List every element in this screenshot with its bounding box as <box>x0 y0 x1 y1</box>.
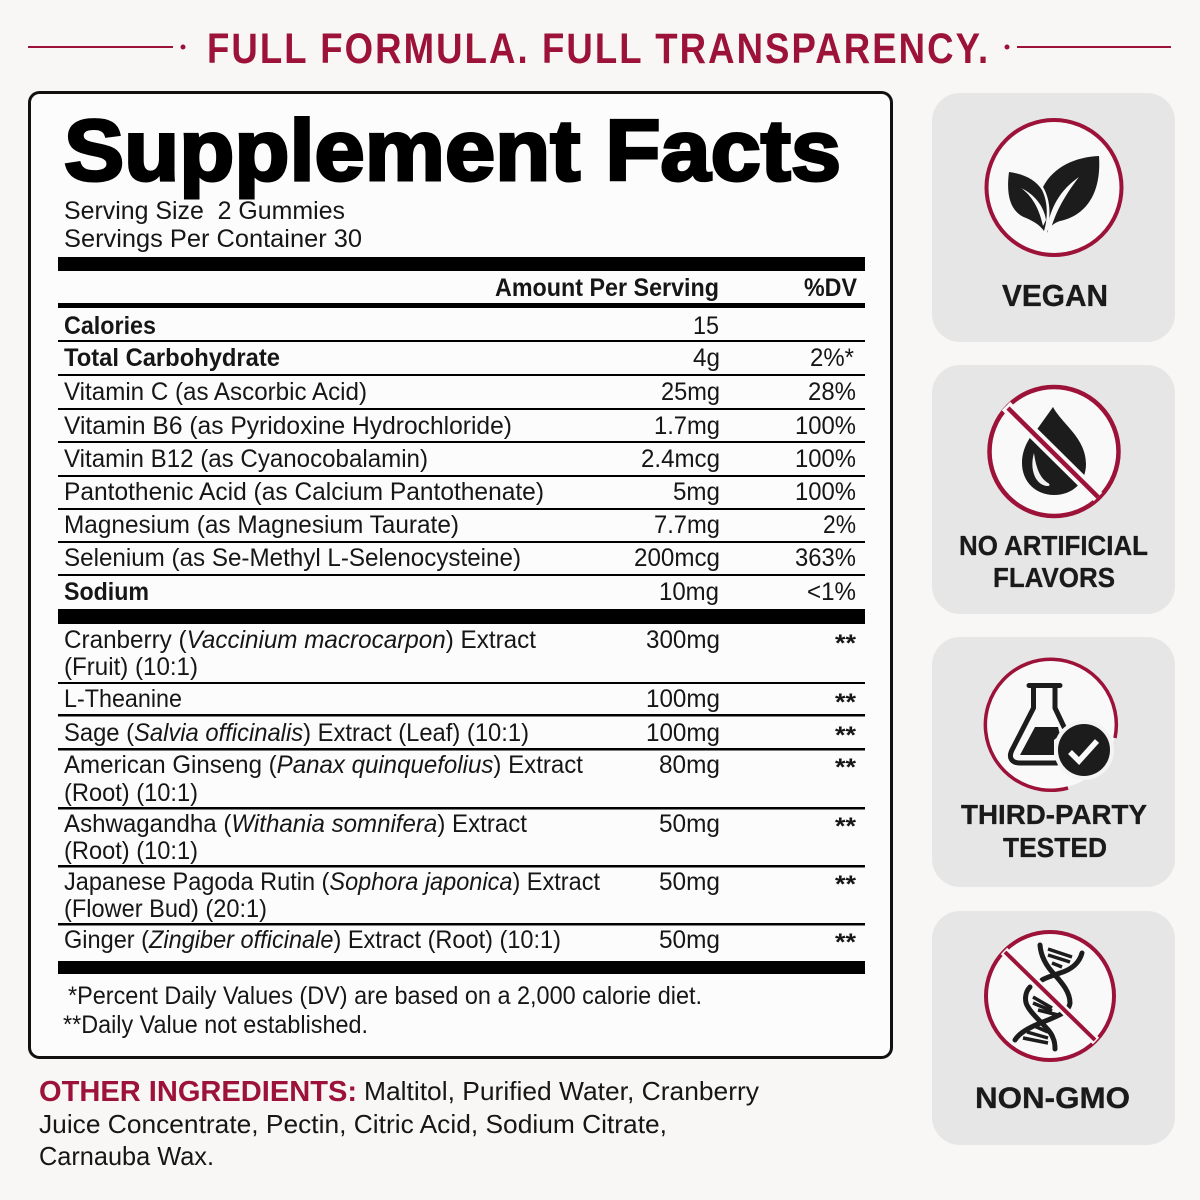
botanical rows: Sage (Salvia officinalis) Extract (Leaf) (10:1) <box>64 719 529 747</box>
botanical rows: L-Theanine <box>64 685 182 713</box>
botanical rows: ** <box>835 929 857 956</box>
other ingredients: Maltitol, Purified Water, Cranberry <box>364 1076 759 1106</box>
footnotes: **Daily Value not established. <box>63 1011 368 1039</box>
botanical rows: ** <box>835 722 857 749</box>
panel: no artificial flavors <box>932 365 1175 614</box>
serving info: Serving Size 2 Gummies <box>64 197 345 225</box>
nutrient rows: Magnesium (as Magnesium Taurate) <box>64 511 459 539</box>
botanical rows: 100mg <box>646 719 720 747</box>
other ingredients: Carnauba Wax. <box>39 1141 214 1171</box>
botanical rows: Japanese Pagoda Rutin (Sophora japonica) Extract <box>64 868 600 896</box>
nutrient rows: 2% <box>823 511 856 539</box>
other ingredients: OTHER INGREDIENTS: <box>39 1076 357 1108</box>
botanical rows <box>64 626 857 956</box>
icon: drop <box>1006 406 1098 497</box>
header <box>28 25 1171 73</box>
thick bars and rules <box>58 257 865 974</box>
icon: flask with check <box>1010 686 1114 780</box>
botanical rows: (Fruit) (10:1) <box>64 653 198 681</box>
botanical rows: ** <box>835 871 857 898</box>
panel: supplement facts <box>30 92 892 1058</box>
botanical rows: Ginger (Zingiber officinale) Extract (Root) (10:1) <box>64 926 561 954</box>
column headers <box>495 274 857 302</box>
nutrient rows: Vitamin B6 (as Pyridoxine Hydrochloride) <box>64 412 512 440</box>
footnotes <box>63 982 702 1039</box>
other ingredients <box>39 1076 759 1171</box>
footnotes: *Percent Daily Values (DV) are based on a 2,000 calorie diet. <box>68 982 702 1010</box>
panel: non-gmo <box>932 911 1175 1145</box>
botanical rows: (Flower Bud) (20:1) <box>64 895 267 923</box>
botanical rows: ** <box>835 630 857 657</box>
botanical rows: (Root) (10:1) <box>64 779 198 807</box>
panel: third-party tested <box>932 637 1175 887</box>
nutrient rows: 25mg <box>661 378 720 406</box>
title: full formula: FULL FORMULA. FULL TRANSPARENCY. <box>207 25 988 73</box>
nutrient rows: Calories <box>64 312 156 340</box>
nutrient rows: 1.7mg <box>654 412 720 440</box>
botanical rows: Ashwagandha (Withania somnifera) Extract <box>64 810 527 838</box>
column headers: %DV <box>804 274 857 302</box>
icon: leaves <box>1008 156 1099 233</box>
panel: vegan <box>932 93 1175 342</box>
botanical rows: (Root) (10:1) <box>64 837 198 865</box>
botanical rows: 50mg <box>659 926 720 954</box>
nutrient rows: 2.4mcg <box>641 445 720 473</box>
botanical rows: Cranberry (Vaccinium macrocarpon) Extract <box>64 626 536 654</box>
nutrient rows: 10mg <box>659 578 719 606</box>
nutrient rows: 28% <box>808 378 856 406</box>
botanical rows: ** <box>835 754 857 781</box>
label: no artificial flavors <box>959 530 1148 593</box>
label: no artificial flavors: NO ARTIFICIAL <box>959 530 1148 561</box>
nutrient rows: Pantothenic Acid (as Calcium Pantothenate) <box>64 478 544 506</box>
botanical rows: 50mg <box>659 868 720 896</box>
botanical rows: ** <box>835 689 857 716</box>
botanical rows: 100mg <box>646 685 720 713</box>
nutrient rows: 100% <box>795 412 856 440</box>
serving info: Servings Per Container 30 <box>64 225 362 253</box>
label: vegan: VEGAN <box>1002 278 1108 313</box>
nutrient rows: Vitamin B12 (as Cyanocobalamin) <box>64 445 428 473</box>
icon: dna <box>1004 945 1096 1049</box>
nutrient rows: 200mcg <box>634 544 720 572</box>
botanical rows: American Ginseng (Panax quinquefolius) Extract <box>64 751 583 779</box>
serving info <box>64 197 362 253</box>
column headers: Amount Per Serving <box>495 274 719 302</box>
nutrient rows: 363% <box>795 544 856 572</box>
botanical rows: ** <box>835 813 857 840</box>
label: third-party tested <box>961 799 1147 863</box>
nutrient rows <box>64 312 856 606</box>
nutrient rows: Selenium (as Se-Methyl L-Selenocysteine) <box>64 544 521 572</box>
nutrient rows: Sodium <box>64 578 149 606</box>
botanical rows: 80mg <box>659 751 720 779</box>
label: no artificial flavors: FLAVORS <box>993 562 1115 593</box>
nutrient rows: 15 <box>693 312 719 340</box>
nutrient rows: 2%* <box>810 344 854 372</box>
nutrient rows: 100% <box>795 478 856 506</box>
botanical rows: 300mg <box>646 626 720 654</box>
nutrient rows: 4g <box>693 344 720 372</box>
nutrient rows: 7.7mg <box>654 511 720 539</box>
other ingredients: Juice Concentrate, Pectin, Citric Acid, Sodium Citrate, <box>39 1109 667 1139</box>
label: non-gmo: NON-GMO <box>975 1082 1130 1115</box>
nutrient rows: <1% <box>807 578 856 606</box>
nutrient rows: Vitamin C (as Ascorbic Acid) <box>64 378 367 406</box>
nutrient rows: 100% <box>795 445 856 473</box>
nutrient rows: Total Carbohydrate <box>64 344 280 372</box>
label: third-party tested: THIRD-PARTY <box>961 799 1147 830</box>
botanical rows: 50mg <box>659 810 720 838</box>
heading: Supplement Facts <box>64 103 841 199</box>
nutrient rows: 5mg <box>673 478 720 506</box>
label: third-party tested: TESTED <box>1003 832 1107 863</box>
